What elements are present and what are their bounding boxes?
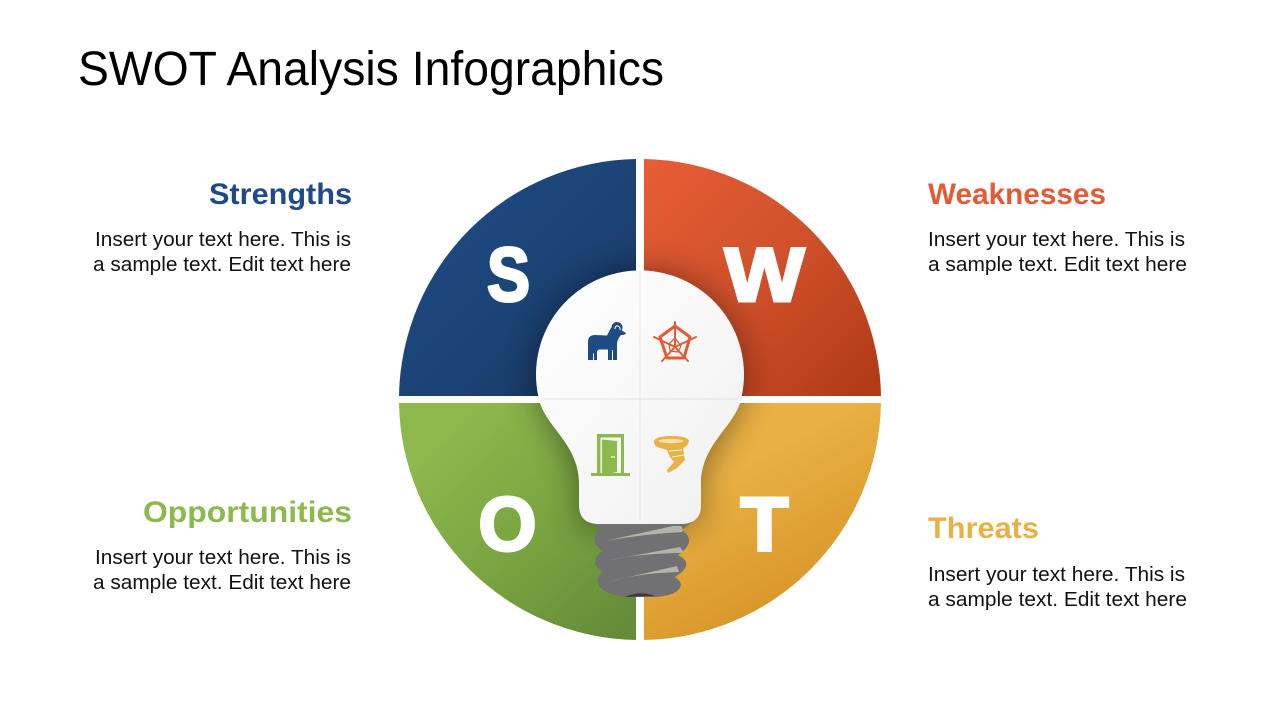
icon: ram [588,322,626,360]
text block: threats: a sample text. Edit text here [928,588,1187,611]
letter O: O [478,482,536,568]
chart: SWOT circle quadrants [399,159,881,640]
text block: strengths: a sample text. Edit text here [93,253,351,276]
bulb screw base [587,522,692,597]
heading: threats: Threats [928,512,1039,545]
text block: weaknesses: Insert your text here. This is [928,228,1185,251]
heading: weaknesses: Weaknesses [928,178,1106,211]
panel: threats text [928,512,1187,611]
bulb glass [536,270,744,524]
text block: strengths: Insert your text here. This is [95,228,351,251]
text block: opportunities: Insert your text here. This is [95,546,351,569]
text block: opportunities: a sample text. Edit text here [93,571,351,594]
letter T: T [740,482,788,568]
panel: strengths text [93,178,352,276]
icon: spider web [654,322,696,361]
text block: opportunities [93,546,351,594]
icon: light bulb [536,270,744,597]
text block: threats: Insert your text here. This is [928,563,1185,586]
quadrant: strengths [399,159,636,396]
panel: weaknesses text [928,178,1187,276]
quadrant: weaknesses [644,159,881,396]
icon: door [591,434,630,476]
title: SWOT Analysis Infographics [78,43,664,96]
icon: tornado [654,436,689,473]
heading: strengths: Strengths [209,178,352,211]
letter S: S [487,233,530,318]
quadrant: threats [644,403,881,640]
text block: weaknesses: a sample text. Edit text here [928,253,1187,276]
text block: strengths [93,228,351,276]
panel: opportunities text [93,496,352,594]
letter W: W [724,233,805,318]
text block: threats [928,563,1187,611]
bulb shadow [536,270,744,525]
heading: opportunities: Opportunities [143,496,352,529]
quadrant: opportunities [399,403,636,640]
text block: weaknesses [928,228,1187,276]
